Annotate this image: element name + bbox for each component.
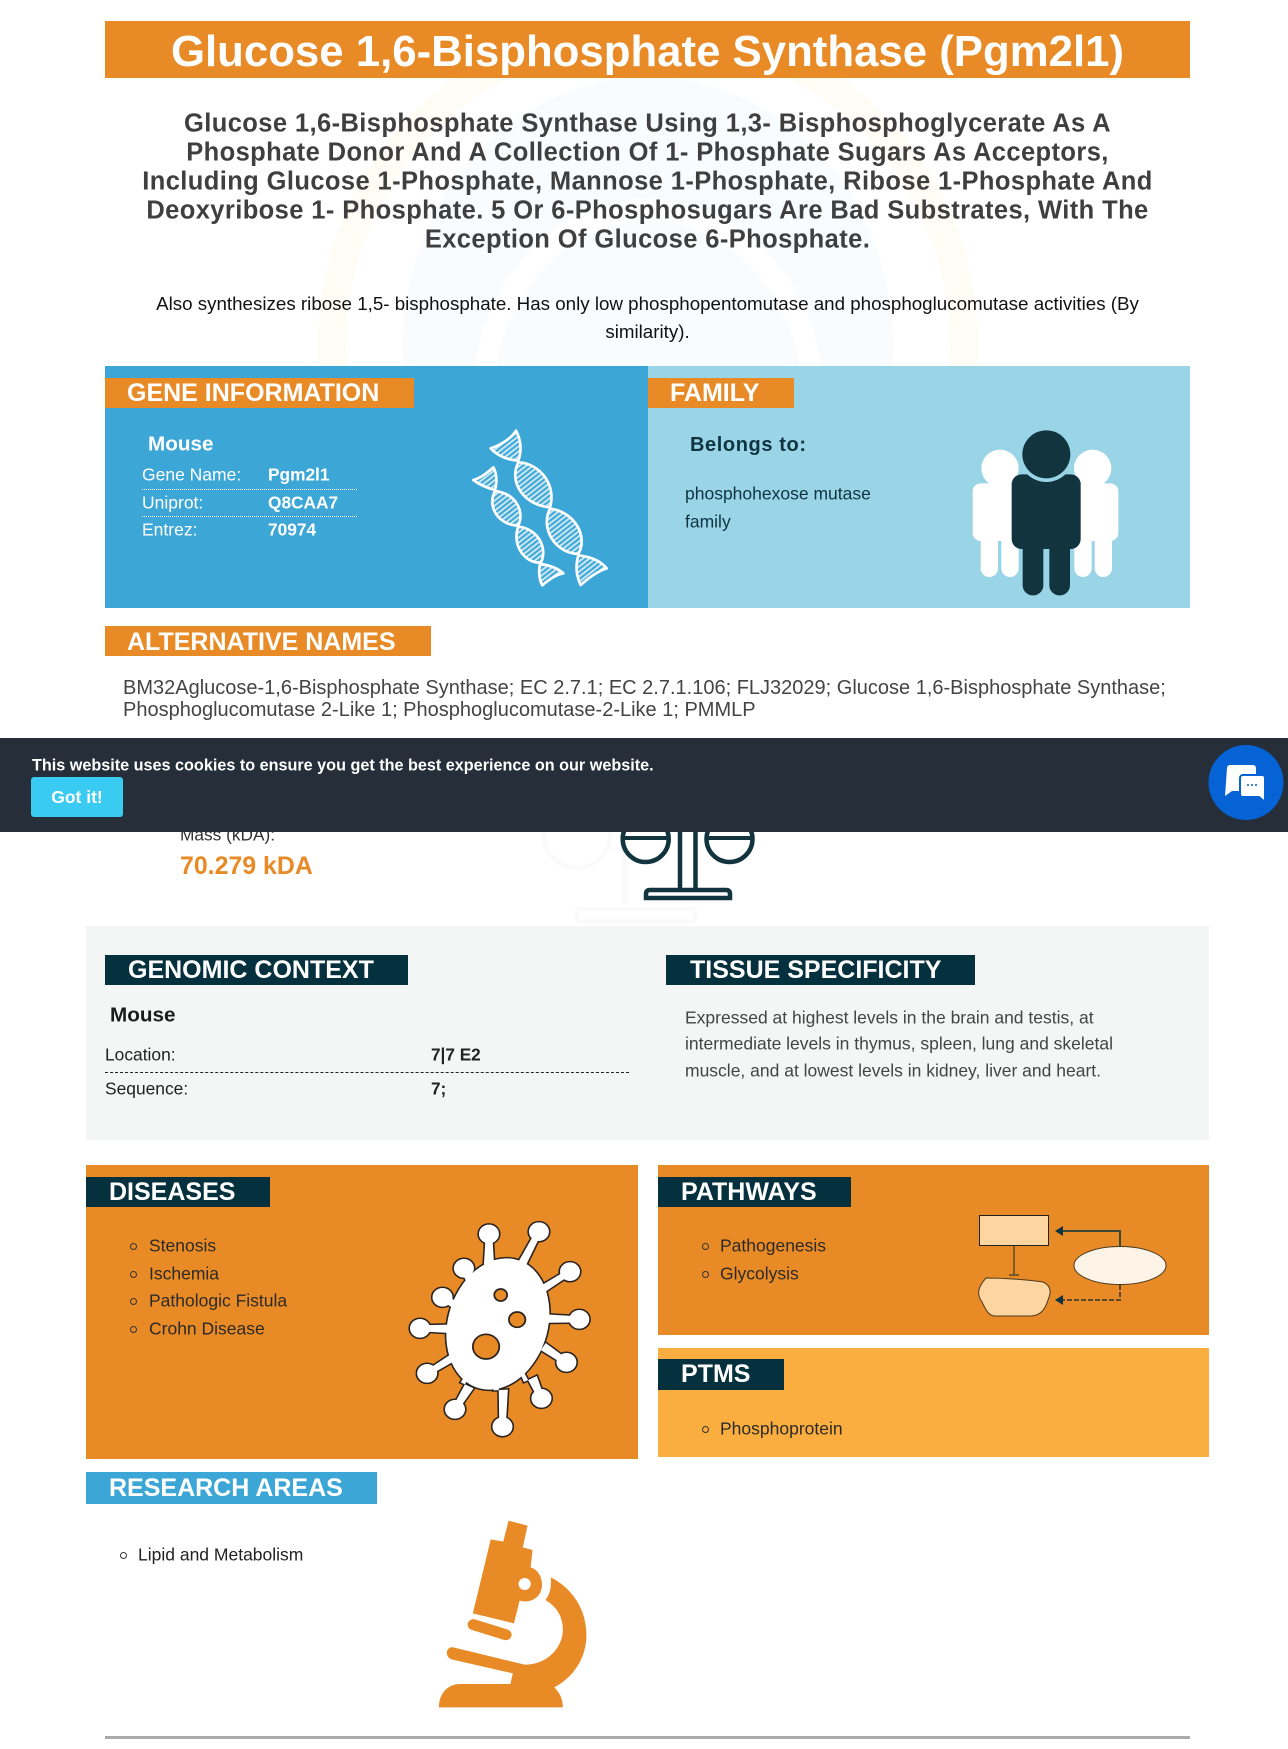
subtitle description: Including Glucose 1-Phosphate, Mannose 1-Phosphate, Ribose 1-Phosphate And: [142, 168, 1153, 196]
heading: PTMs: PTMS: [681, 1360, 750, 1388]
diseases list: Stenosis: [149, 1236, 216, 1256]
subtitle description: Glucose 1,6-Bisphosphate Synthase Using 1,3- Bisphosphoglycerate As A: [184, 110, 1111, 138]
diseases list: Ischemia: [149, 1264, 219, 1284]
heading: family: [648, 378, 794, 408]
alternative names text: BM32Aglucose-1,6-Bisphosphate Synthase; EC 2.7.1; EC 2.7.1.106; FLJ32029; Glucose 1,6-Bisphosphate Synthase;: [123, 677, 1166, 699]
cookie banner: [0, 738, 1288, 832]
function paragraph: Also synthesizes ribose 1,5- bisphosphate. Has only low phosphopentomutase and phosphoglucomutase activities (By: [156, 293, 1139, 314]
icon: virus: [408, 1220, 591, 1438]
diseases list: Pathologic Fistula: [149, 1290, 287, 1310]
gene fields table: Entrez:: [142, 520, 197, 540]
heading: family: FAMILY: [670, 379, 759, 407]
species label: Mouse: [148, 433, 214, 456]
PTMs list: Phosphoprotein: [720, 1418, 843, 1438]
heading: pathways: [658, 1177, 851, 1207]
subtitle description: Deoxyribose 1- Phosphate. 5 Or 6-Phosphosugars Are Bad Substrates, With The: [146, 197, 1149, 225]
gene fields table: Pgm2l1: [268, 465, 329, 485]
icon: microscope: [438, 1520, 586, 1708]
gene fields table: Gene Name:: [142, 464, 241, 484]
location row: Location:: [105, 1045, 176, 1065]
button: got it: Got it!: [51, 787, 103, 807]
gene fields table: Q8CAA7: [268, 493, 338, 513]
heading: alternative names: ALTERNATIVE NAMES: [127, 628, 396, 656]
research areas list: Lipid and Metabolism: [138, 1544, 303, 1564]
alternative names text: [123, 677, 1166, 721]
gene fields table: [142, 464, 357, 540]
panel: family: [648, 366, 1190, 608]
panel: gene information: [105, 366, 648, 608]
title: Glucose 1,6-Bisphosphate Synthase (Pgm2l1): [171, 27, 1124, 76]
tissue specificity text: intermediate levels in thymus, spleen, lung and skeletal: [685, 1034, 1113, 1054]
icon: people: [972, 430, 1118, 596]
tissue specificity text: muscle, and at lowest levels in kidney, liver and heart.: [685, 1060, 1101, 1080]
dashed divider and sequence row: [105, 1072, 629, 1104]
pathways list: Glycolysis: [720, 1264, 799, 1284]
molecular mass block: Mass (kDA):: [180, 825, 275, 845]
heading: genomic context: GENOMIC CONTEXT: [128, 956, 374, 984]
alternative names text: Phosphoglucomutase 2-Like 1; Phosphoglucomutase-2-Like 1; PMMLP: [123, 699, 756, 721]
molecular mass block: [180, 825, 313, 880]
panel: diseases: [86, 1165, 638, 1459]
molecular mass block: 70.279 kDA: [180, 852, 313, 880]
subtitle description: [142, 110, 1153, 254]
dashed divider and sequence row: 7;: [431, 1079, 446, 1099]
footer rule: [105, 1736, 1190, 1739]
pathways list: Pathogenesis: [720, 1236, 826, 1256]
location row: [105, 1045, 481, 1065]
function paragraph: similarity).: [605, 321, 690, 342]
species label: Mouse: [110, 1004, 176, 1027]
family text: [685, 484, 871, 532]
diseases list: [130, 1236, 288, 1338]
heading: research areas: RESEARCH AREAS: [109, 1474, 343, 1502]
icon: balance scale: [620, 832, 755, 900]
panel: genomic context and tissue specificity: [86, 926, 1209, 1140]
background watermark: [318, 78, 978, 366]
heading: tissue specificity: TISSUE SPECIFICITY: [690, 956, 941, 984]
location row: 7|7 E2: [431, 1045, 481, 1065]
function paragraph: [156, 293, 1139, 342]
dashed divider and sequence row: Sequence:: [105, 1079, 188, 1099]
pathways list: [702, 1236, 826, 1284]
family subheading: Belongs to:: [690, 434, 807, 456]
tissue specificity text: [685, 1008, 1113, 1080]
heading: diseases: DISEASES: [109, 1178, 235, 1206]
icon: pathway diagram: [978, 1215, 1166, 1316]
button: got it: [31, 777, 123, 817]
subtitle description: Exception Of Glucose 6-Phosphate.: [425, 226, 870, 254]
gene fields table: Uniprot:: [142, 492, 203, 512]
heading: PTMs: [658, 1359, 784, 1390]
panel: pathways: [658, 1165, 1209, 1335]
family text: phosphohexose mutase: [685, 484, 871, 504]
heading: diseases: [86, 1177, 270, 1207]
cookie message: This website uses cookies to ensure you get the best experience on our website.: [32, 756, 654, 774]
icon: DNA helices: [472, 429, 608, 587]
subtitle description: Phosphate Donor And A Collection Of 1- Phosphate Sugars As Acceptors,: [186, 139, 1109, 167]
tissue specificity text: Expressed at highest levels in the brain and testis, at: [685, 1008, 1094, 1028]
diseases list: Crohn Disease: [149, 1318, 265, 1338]
family text: family: [685, 512, 731, 532]
panel: PTMs: [658, 1348, 1209, 1457]
gene fields table: 70974: [268, 520, 316, 540]
heading: pathways: PATHWAYS: [681, 1178, 817, 1206]
chat button: [1208, 745, 1284, 820]
heading: gene information: GENE INFORMATION: [127, 379, 379, 407]
